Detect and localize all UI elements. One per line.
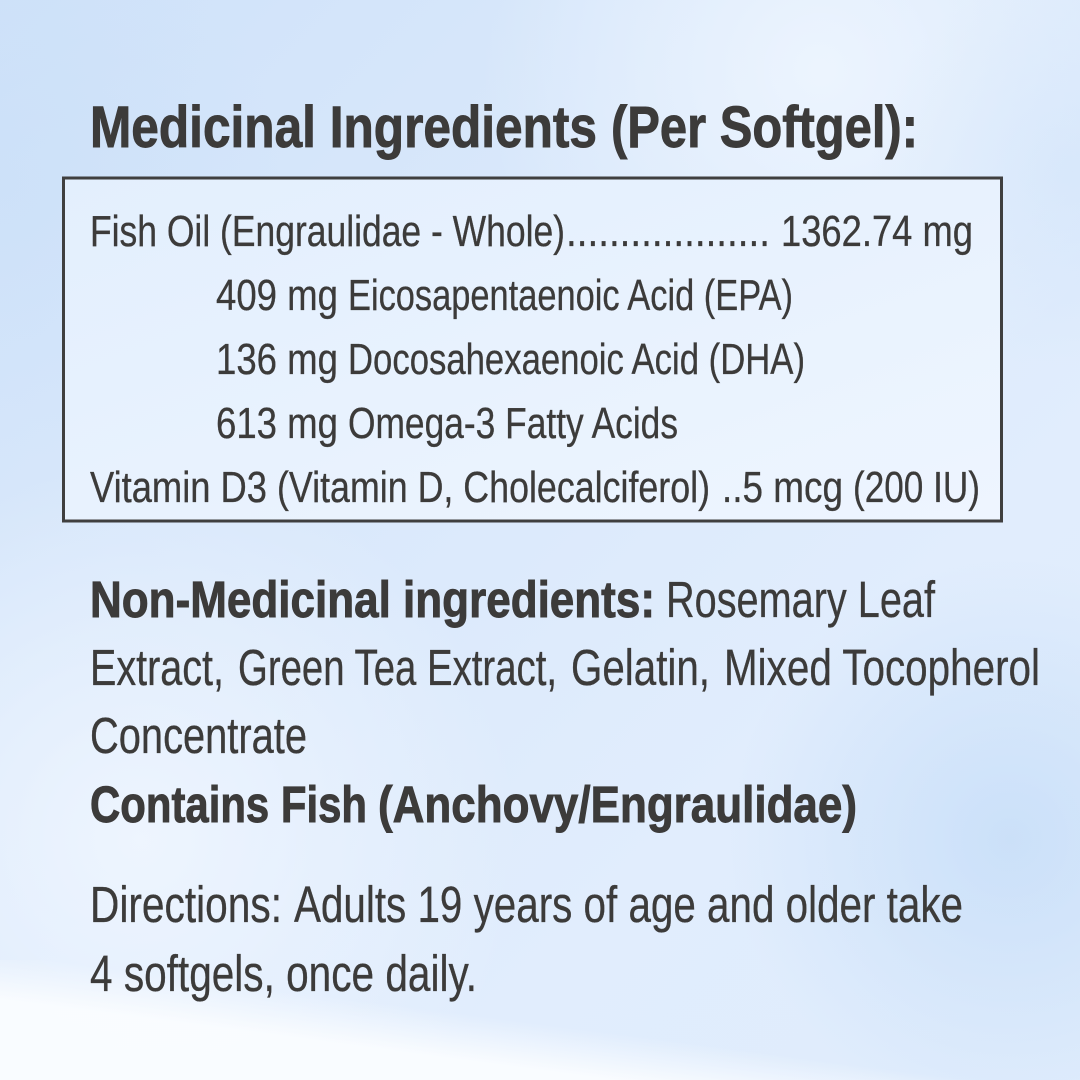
fish oil row: 1362.74 mg (781, 207, 973, 256)
EPA row: Eicosapentaenoic Acid (EPA) (348, 271, 793, 320)
EPA row: 409 mg (216, 271, 338, 320)
panel: medicinal ingredients table (64, 178, 1002, 521)
allergen statement: Contains Fish (90, 776, 367, 833)
fish oil row (90, 207, 973, 256)
vitamin D3 row: (200 IU) (853, 463, 980, 512)
EPA row (216, 271, 793, 320)
omega-3 row (216, 399, 678, 448)
non-medicinal ingredients text: Rosemary Leaf (666, 571, 936, 628)
DHA row: Docosahexaenoic Acid (DHA) (348, 335, 805, 384)
non-medicinal ingredients text: Concentrate (90, 707, 307, 764)
non-medicinal ingredients text: Extract, (90, 639, 224, 696)
non-medicinal ingredients text: Non-Medicinal ingredients: (90, 571, 655, 628)
allergen statement: (Anchovy/Engraulidae) (378, 776, 857, 833)
vitamin D3 row: (Vitamin D, Cholecalciferol) (277, 463, 710, 512)
title: Medicinal Ingredients (90, 95, 597, 160)
omega-3 row: 613 mg (216, 399, 338, 448)
directions: Directions: (90, 876, 282, 933)
DHA row: 136 mg (216, 335, 338, 384)
vitamin D3 row: ..5 mcg (722, 463, 843, 512)
non-medicinal ingredients text: Gelatin, (571, 639, 710, 696)
fish oil row: Fish Oil (Engraulidae - Whole) (90, 207, 565, 256)
vitamin D3 row (90, 463, 980, 512)
title: (Per Softgel): (611, 95, 918, 160)
omega-3 row: Omega-3 Fatty Acids (348, 399, 678, 448)
non-medicinal ingredients text: Green Tea Extract, (238, 639, 557, 696)
fish oil row: ................... (566, 207, 770, 256)
allergen statement (90, 776, 857, 833)
directions (90, 876, 963, 1002)
vitamin D3 row: Vitamin D3 (90, 463, 267, 512)
DHA row (216, 335, 805, 384)
directions: 4 softgels, once daily. (90, 945, 477, 1002)
non-medicinal ingredients text (90, 571, 1040, 764)
